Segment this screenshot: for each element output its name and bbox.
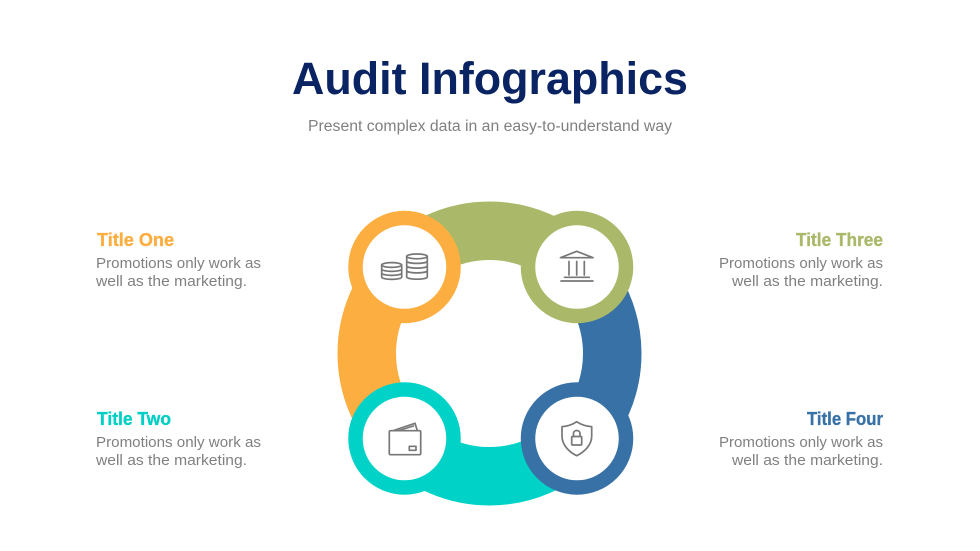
- icon: coin stacks: [382, 254, 427, 279]
- subtitle: Present complex data in an easy-to-understand way: [308, 118, 672, 135]
- body: title one: Promotions only work as: [96, 255, 261, 272]
- ring diagram: [356, 218, 626, 488]
- heading: title one: Title One: [97, 230, 174, 250]
- node: orange coins: [356, 218, 454, 316]
- title: Audit Infographics: [292, 53, 688, 104]
- body: title one: well as the marketing.: [95, 273, 247, 290]
- body: title four: Promotions only work as: [719, 434, 883, 451]
- heading: title two: Title Two: [97, 409, 171, 429]
- text block: title one: [95, 230, 261, 290]
- node: teal wallet: [356, 390, 454, 488]
- text block: title four: [719, 409, 883, 469]
- icon: wallet: [389, 423, 421, 455]
- text block: title two: [95, 409, 261, 469]
- arc: teal bottom: [403, 440, 576, 476]
- body: title two: Promotions only work as: [96, 434, 261, 451]
- icon: shield with lock: [562, 422, 592, 456]
- body: title two: well as the marketing.: [95, 452, 247, 469]
- arc: blue right: [576, 267, 612, 440]
- body: title three: Promotions only work as: [719, 255, 883, 272]
- heading: title three: Title Three: [796, 230, 883, 250]
- node: blue shield: [528, 390, 626, 488]
- text block: title three: [719, 230, 883, 290]
- body: title four: well as the marketing.: [731, 452, 883, 469]
- node: green bank: [528, 218, 626, 316]
- icon: bank building: [560, 251, 593, 281]
- arc: green top: [403, 231, 576, 267]
- body: title three: well as the marketing.: [731, 273, 883, 290]
- arc: orange left: [367, 267, 403, 440]
- heading: title four: Title Four: [807, 409, 883, 429]
